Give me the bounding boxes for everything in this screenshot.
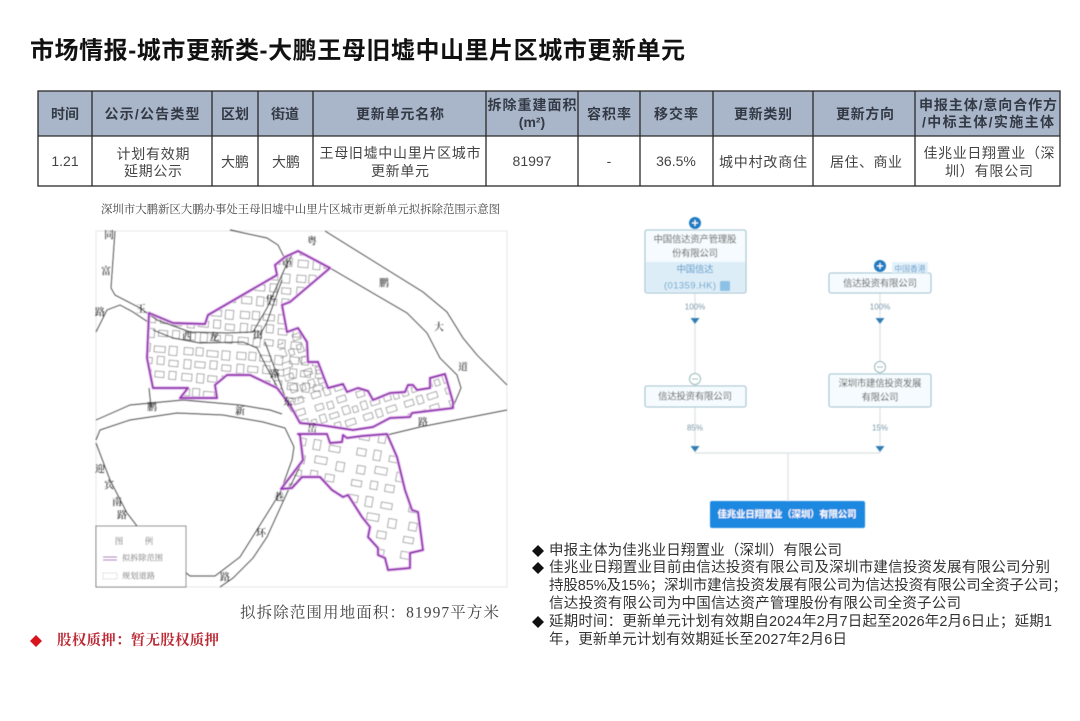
- table header row: 时间: [51, 106, 79, 122]
- node: 深圳市建信投资发展有限公司: 深圳市建信投资发展: [838, 378, 922, 390]
- map legend: 拟拆除范围: [122, 552, 163, 562]
- ownership 100% right: 100%: [870, 302, 890, 312]
- map road labels: 宾: [104, 478, 114, 492]
- table data row: 佳兆业日翔置业（深: [924, 145, 1054, 161]
- map buildings: [145, 250, 460, 575]
- table header row: 街道: [271, 106, 299, 122]
- node: 佳兆业日翔置业（深圳）有限公司: 佳兆业日翔置业（深圳）有限公司: [718, 508, 856, 520]
- map road labels: 迎: [95, 462, 105, 476]
- map road labels: 粤: [307, 234, 317, 248]
- map legend: 图: [115, 536, 123, 546]
- node: 信达投资有限公司 (中国香港): 信达投资有限公司: [843, 278, 917, 290]
- map legend: [96, 526, 186, 587]
- map road labels: 路: [270, 368, 280, 380]
- table header row: (m²): [519, 114, 545, 130]
- map legend: 规划道路: [122, 570, 155, 580]
- map road labels: 东: [283, 396, 294, 408]
- node: 深圳市建信投资发展有限公司: 有限公司: [862, 392, 898, 404]
- bullet: shareholding: [532, 559, 1067, 612]
- map road labels: 路: [95, 306, 105, 318]
- table data row: 81997: [513, 153, 552, 169]
- map area note: 拟拆除范围用地面积：81997平方米: [240, 602, 499, 622]
- table header row: 移交率: [654, 106, 698, 122]
- equity pledge note: 股权质押：暂无股权质押: [57, 631, 220, 649]
- bullet: extension: [532, 613, 1052, 648]
- node: 中国信达资产管理股份有限公司: 中国信达资产管理股: [654, 234, 737, 246]
- project table: [38, 91, 1060, 186]
- table header row: 更新方向: [836, 106, 894, 122]
- ownership 100% right: [870, 302, 890, 324]
- map road labels: 王: [136, 302, 146, 316]
- map roads: [96, 230, 507, 587]
- key facts bullets: [532, 542, 1067, 648]
- ownership 100% left: 100%: [685, 302, 705, 312]
- map road labels: 鹏: [147, 400, 157, 414]
- map road labels: 龙: [209, 330, 219, 344]
- map road labels: 路: [220, 570, 230, 584]
- table header row: 拆除重建面积: [488, 97, 576, 113]
- table data row: 圳）有限公司: [945, 163, 1033, 179]
- table data row: 36.5%: [656, 153, 696, 169]
- equity structure chart: [645, 217, 931, 528]
- map road labels: 新: [235, 404, 245, 418]
- table data row: 延期公示: [124, 163, 182, 179]
- map road labels: 路: [117, 508, 127, 522]
- title: 市场情报-城市更新类-大鹏王母旧墟中山里片区城市更新单元: [30, 36, 685, 64]
- map road labels: [95, 230, 468, 584]
- connector lines: [695, 293, 880, 501]
- table header row: [38, 91, 1060, 136]
- bullet: applicant: 申报主体为佳兆业日翔置业（深圳）有限公司: [549, 542, 842, 559]
- table data row: 更新单元: [371, 163, 429, 179]
- node: 信达投资有限公司: [645, 374, 746, 407]
- table header row: 公示/公告类型: [104, 106, 200, 122]
- map road labels: 南: [112, 496, 122, 508]
- table header row: 更新类别: [734, 106, 792, 122]
- bullet: extension: 年，更新单元计划有效期延长至2027年2月6日: [549, 631, 847, 648]
- table data row: 计划有效期: [116, 146, 190, 162]
- map road labels: 华: [265, 294, 275, 306]
- map road labels: 路: [418, 416, 428, 428]
- table header row: 更新单元名称: [356, 106, 444, 122]
- map road labels: 中: [282, 258, 292, 270]
- ownership 85%: [687, 424, 703, 452]
- table header row: 容积率: [587, 106, 631, 122]
- table data row: 大鹏: [221, 154, 249, 170]
- bullet: shareholding: 佳兆业日翔置业目前由信达投资有限公司及深圳市建信投资发展有限公司分别: [549, 559, 1050, 576]
- table data row: 城中村改商住: [719, 154, 807, 170]
- node: 中国信达资产管理股份有限公司: [645, 217, 746, 293]
- demolition scope map: [95, 230, 507, 587]
- bullet: shareholding: 持股85%及15%；深圳市建信投资发展有限公司为信达投资有限公司全资子公司；: [549, 576, 1067, 594]
- ownership 15%: 15%: [872, 424, 888, 432]
- ownership 15%: [872, 424, 888, 452]
- node: 信达投资有限公司 (中国香港): 中国香港: [894, 264, 926, 274]
- table data row: 居住、商业: [830, 154, 902, 170]
- node: 信达投资有限公司 (中国香港): [829, 260, 931, 293]
- table header row: 申报主体/意向合作方: [919, 97, 1057, 113]
- ownership 85%: 85%: [687, 424, 703, 432]
- table data row: 王母旧墟中山里片区城市: [320, 145, 480, 161]
- map road labels: 富: [101, 264, 111, 278]
- bullet: extension: 延期时间：更新单元计划有效期自2024年2月7日起至2026年2月6日止；延期1: [549, 613, 1052, 630]
- node: 佳兆业日翔置业（深圳）有限公司: [710, 501, 865, 528]
- map road labels: 鹏: [379, 276, 389, 290]
- map caption: 深圳市大鹏新区大鹏办事处王母旧墟中山里片区城市更新单元拟拆除范围示意图: [101, 202, 500, 216]
- map road labels: 大: [434, 320, 444, 334]
- table data row: 1.21: [51, 153, 79, 169]
- map road labels: 环: [256, 528, 267, 540]
- map road labels: 巷: [274, 490, 284, 504]
- table data row: [51, 145, 1054, 179]
- node: 中国信达资产管理股份有限公司: 中国信达: [676, 264, 714, 276]
- map road labels: 岳: [307, 422, 317, 434]
- table data row: -: [607, 153, 612, 169]
- table header row: 区划: [221, 106, 249, 122]
- node: 深圳市建信投资发展有限公司: [829, 362, 931, 407]
- node: 中国信达资产管理股份有限公司: (01359.HK): [664, 280, 716, 292]
- ownership 100% left: [685, 302, 705, 324]
- map road labels: 道: [458, 360, 468, 374]
- bullet: shareholding: 信达投资有限公司为中国信达资产管理股份有限公司全资子公司: [549, 594, 961, 612]
- map road labels: 西: [182, 330, 192, 342]
- map road labels: 街: [253, 328, 263, 342]
- table header row: /中标主体/实施主体: [922, 114, 1054, 130]
- node: 信达投资有限公司: 信达投资有限公司: [658, 390, 732, 402]
- node: 中国信达资产管理股份有限公司: 份有限公司: [672, 248, 718, 260]
- table data row: 大鹏: [272, 154, 300, 170]
- map boundary: north section: [147, 251, 453, 430]
- map road labels: 同: [104, 230, 114, 242]
- map legend: 例: [145, 536, 154, 546]
- map boundary: south section: [281, 434, 423, 570]
